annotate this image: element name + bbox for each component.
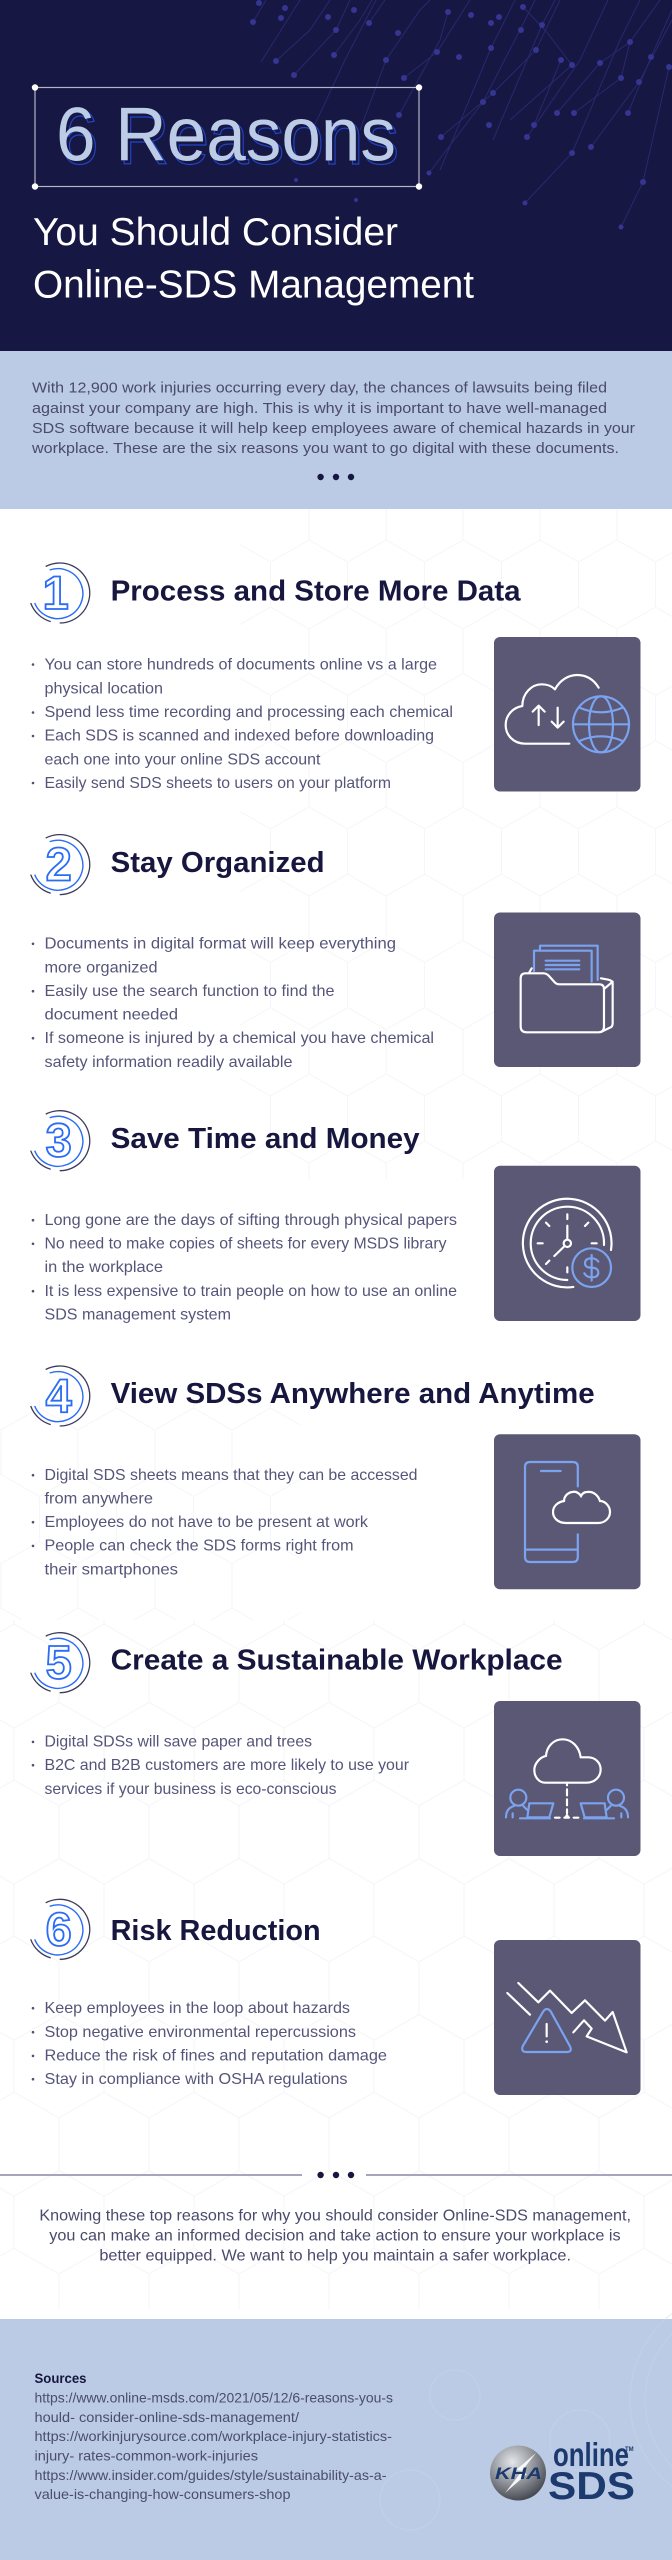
bullet list: Each SDS is scanned and indexed before downloading [44,728,434,745]
bullet list: Stop negative environmental repercussions [44,2024,356,2041]
bullet list: Documents in digital format will keep everything [44,936,396,953]
bullet list: Digital SDS sheets means that they can be accessed [44,1467,418,1484]
heading: Process and Store More Data [111,575,521,607]
subtitle: You Should Consider [33,211,398,254]
bullet list: Keep employees in the loop about hazards [44,2000,350,2017]
bullet list: If someone is injured by a chemical you have chemical [44,1030,434,1047]
sources: https://workinjurysource.com/workplace-injury-statistics- [34,2429,392,2444]
panel: reason 2 [31,835,640,1071]
bullet list: document needed [44,1007,178,1024]
panel: header [0,0,672,351]
number badge 2: 2 [46,838,72,891]
logo: KHA online SDS: TM [625,2447,634,2453]
closing text: you can make an informed decision and take action to ensure your workplace is [49,2228,621,2245]
bullet list: in the workplace [44,1259,163,1276]
bullet list: Long gone are the days of sifting through physical papers [44,1212,457,1229]
panel: reason 5 [31,1633,640,1856]
icon card: clock and dollar [494,1166,640,1321]
bullet list [32,1467,417,1578]
intro text: workplace. These are the six reasons you want to go digital with these documents. [31,440,619,457]
bullet list [32,1734,409,1798]
bullet list [32,2000,387,2088]
number badge 4 [31,1366,90,1426]
heading: View SDSs Anywhere and Anytime [111,1378,595,1410]
heading: Stay Organized [111,847,325,879]
sources [34,2371,393,2502]
sources: https://www.online-msds.com/2021/05/12/6-reasons-you-s [34,2391,393,2406]
number badge 1 [31,563,90,623]
subtitle: Online-SDS Management [33,264,474,307]
bullet list: Reduce the risk of fines and reputation damage [44,2048,387,2065]
title: 6 Reasons: 6 Reasons [56,93,396,178]
intro text: against your company are high. This is why it is important to have well-managed [32,400,607,417]
bullet list: each one into your online SDS account [44,751,321,768]
number badge 4: 4 [46,1369,72,1422]
number badge 2 [31,835,90,895]
divider with dots [0,2172,672,2178]
heading: Create a Sustainable Workplace [111,1644,563,1676]
bullet list [32,1212,457,1324]
bullet list: Easily send SDS sheets to users on your platform [44,775,391,792]
logo: KHA online SDS: online [553,2436,629,2473]
number badge 5 [31,1633,90,1693]
bullet list: Digital SDSs will save paper and trees [44,1734,312,1751]
bullet list: No need to make copies of sheets for every MSDS library [44,1236,447,1253]
panel: reason 3 [31,1111,640,1324]
closing text: Knowing these top reasons for why you should consider Online-SDS management, [39,2208,631,2225]
logo: KHA online SDS: SDS [548,2465,635,2508]
icon card: phone and cloud [494,1434,640,1589]
sources: hould- consider-online-sds-management/ [34,2410,299,2425]
logo: KHA online SDS [490,2436,635,2508]
number badge 3 [31,1111,90,1171]
heading: Save Time and Money [111,1123,420,1155]
logo: KHA online SDS: KHA [495,2464,542,2483]
sources: Sources [34,2371,86,2386]
icon card: cloud and remote workers [494,1701,640,1856]
panel: footer [0,2290,672,2560]
sources: value-is-changing-how-consumers-shop [34,2487,290,2502]
bullet list: from anywhere [44,1491,153,1508]
bullet list: SDS management system [44,1307,231,1324]
number badge 6 [31,1899,90,1959]
icon card: folder [494,912,640,1067]
number badge 1: 1 [43,566,69,619]
bullet list: more organized [44,960,158,976]
number badge 5: 5 [46,1636,72,1689]
bullet list [32,936,434,1071]
title frame [32,84,422,190]
bullet list: Stay in compliance with OSHA regulations [44,2071,348,2088]
bullet list: Easily use the search function to find the [44,983,335,1000]
panel: introduction [0,351,672,509]
bullet list: B2C and B2B customers are more likely to use your [44,1757,409,1774]
bullet list: People can check the SDS forms right from [44,1538,354,1555]
panel: reason 4 [31,1366,640,1589]
panel: reason 6 [31,1899,640,2095]
bullet list [32,656,453,792]
bullet list: It is less expensive to train people on how to use an online [44,1283,457,1300]
panel: reason 1 [31,563,640,792]
bullet list: physical location [44,681,163,698]
closing text: better equipped. We want to help you maintain a safer workplace. [99,2248,571,2265]
dots divider [317,474,354,480]
sources: injury- rates-common-work-injuries [34,2449,258,2464]
intro text [31,380,635,457]
closing text [39,2208,631,2265]
bullet list: Spend less time recording and processing each chemical [44,704,453,721]
intro text: SDS software because it will help keep employees aware of chemical hazards in your [32,420,635,437]
bullet list: services if your business is eco-conscious [44,1781,337,1798]
title: 6 Reasons: 6 Reasons [59,96,399,181]
bullet list: Employees do not have to be present at work [44,1514,368,1531]
icon card: cloud and globe [494,637,640,792]
heading: Risk Reduction [111,1915,321,1947]
circuit pattern background [250,0,672,230]
subtitle [33,211,474,307]
intro text: With 12,900 work injuries occurring every day, the chances of lawsuits being filed [32,380,607,397]
icon card: falling graph and warning [494,1940,640,2095]
bullet list: You can store hundreds of documents online vs a large [44,656,437,673]
bullet list: their smartphones [44,1561,178,1578]
number badge 3: 3 [46,1114,72,1167]
bullet list: safety information readily available [44,1054,293,1071]
number badge 6: 6 [46,1902,72,1955]
sources: https://www.insider.com/guides/style/sustainability-as-a- [34,2468,386,2483]
